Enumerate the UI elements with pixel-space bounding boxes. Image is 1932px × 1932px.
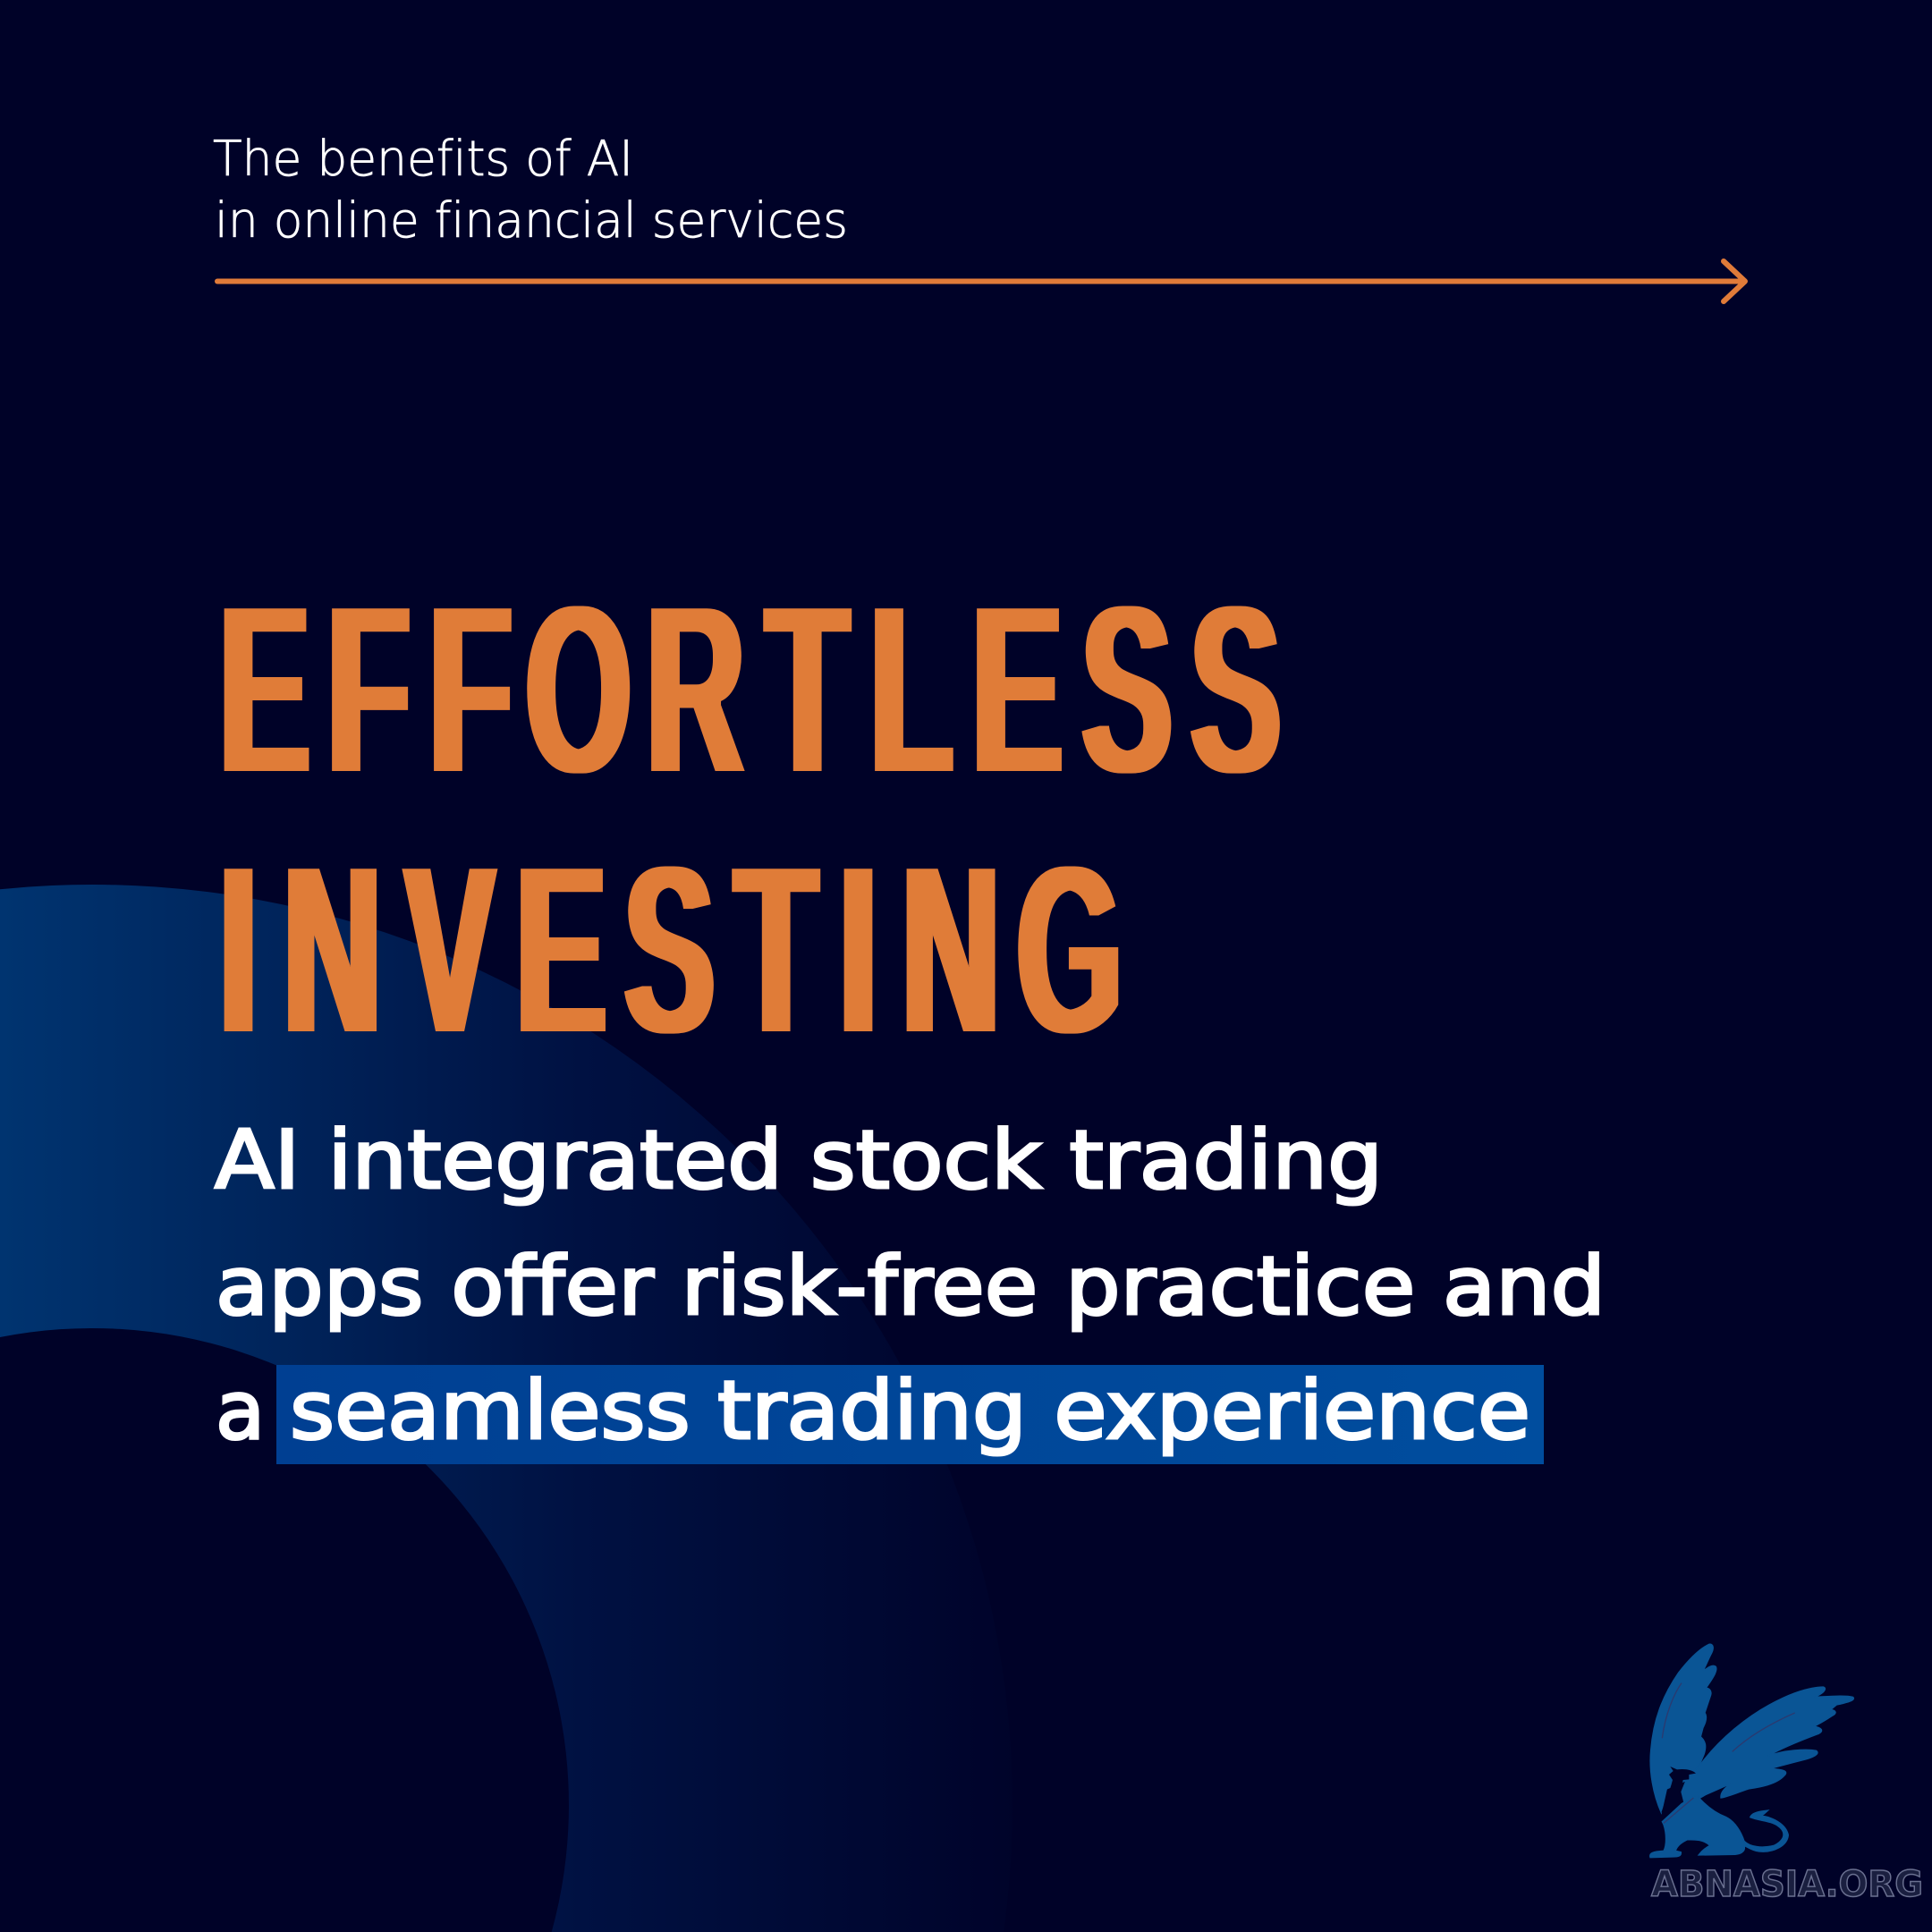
body text: a [216,1364,265,1458]
arrow [217,261,1745,301]
header text: The benefits of AI [213,131,633,187]
header text [213,131,848,249]
title [220,555,1281,1085]
highlight bar [276,1365,1544,1464]
body text: apps offer risk-free practice and [216,1240,1606,1334]
body text: seamless trading experience [290,1364,1530,1458]
header text: in online financial services [215,192,848,249]
body text: AI integrated stock trading [215,1114,1383,1208]
body text [215,1114,1606,1458]
wordmark: ABNASIA.ORG [1651,1864,1923,1905]
logo: griffin and wordmark [1650,1644,1923,1905]
decorative ring arc [0,885,1013,1932]
title: EFFORTLESS [220,555,1281,825]
title: INVESTING [220,816,1123,1085]
icon: griffin [1650,1644,1853,1858]
